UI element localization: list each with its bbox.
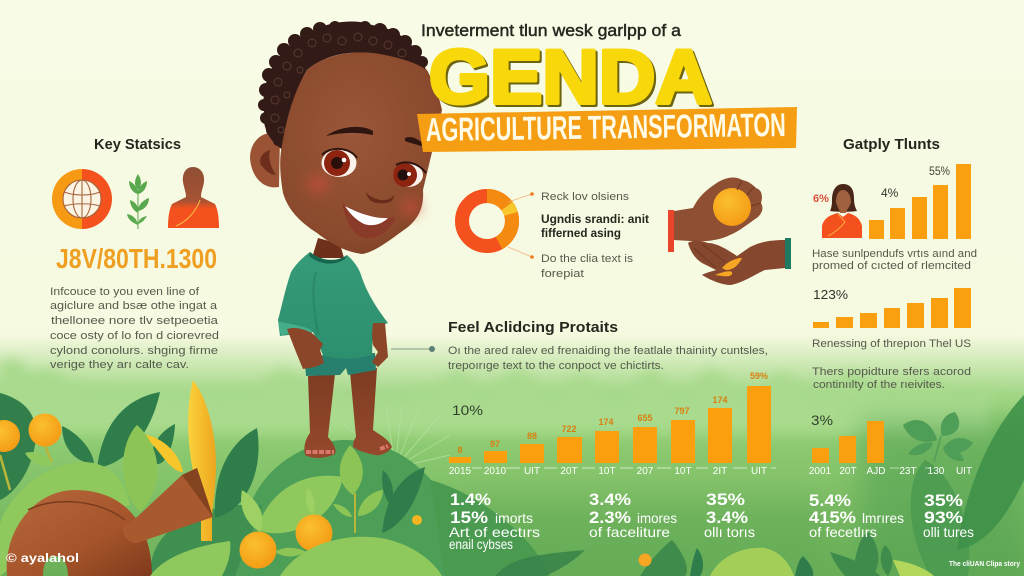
bar chart: 10% xyxy=(452,402,483,418)
heading: Feel Aclidcing Protaits xyxy=(448,319,618,336)
stats row xyxy=(449,490,1020,568)
bar chart: 2IT xyxy=(713,466,727,477)
icon: hands holding fruit xyxy=(668,177,791,285)
stat column 1: enail cybses xyxy=(449,536,513,552)
big number: J8V/80TH.1300 xyxy=(56,243,217,274)
banner xyxy=(417,106,797,152)
bar chart: middle xyxy=(813,287,971,328)
stat column 3: ollı torıs xyxy=(704,524,755,540)
pointer line from character xyxy=(391,346,435,352)
nose xyxy=(366,192,394,203)
callout text: Do the clia text is xyxy=(541,253,634,265)
bar chart: 174 xyxy=(712,395,728,405)
stat column 1: imorts xyxy=(495,510,533,526)
foliage mound under the character xyxy=(230,440,445,576)
paragraph: coce osty of lo fon d ciorevred xyxy=(50,330,219,342)
stat column 5: 35% xyxy=(924,491,963,510)
description xyxy=(448,345,768,372)
stat column 4: lmrıres xyxy=(862,510,904,526)
stat column 4 xyxy=(809,491,904,540)
eyes xyxy=(322,149,426,187)
title block xyxy=(417,21,797,152)
panel: right trends xyxy=(809,136,977,477)
callout text: Ugndis srandi: anit xyxy=(541,214,649,226)
right hand xyxy=(372,323,388,367)
description: lower: Thers popidture sfers acorod xyxy=(812,366,971,378)
character: cartoon boy xyxy=(250,21,442,458)
description: top: Hase sunlpendufs vrtıs aınd and xyxy=(812,248,977,260)
donut chart xyxy=(462,192,534,259)
description: lower xyxy=(812,366,971,391)
banner: AGRICULTURE TRANSFORMATON xyxy=(426,106,786,148)
bar chart: 2010 xyxy=(484,466,507,477)
subtitle: Inveterment tlun wesk garlpp of a xyxy=(421,21,682,40)
bar chart: lower: UIT xyxy=(956,466,972,477)
main title: GENDA xyxy=(429,35,712,120)
bar chart: lower: 20T xyxy=(839,466,857,477)
heading: Key Statsics xyxy=(94,136,181,153)
bar chart: 10T xyxy=(598,466,616,477)
heading: Gatply Tlunts xyxy=(843,136,940,153)
paragraph: verige they arı calte cav. xyxy=(50,359,189,371)
bar chart: lower: AJD xyxy=(867,466,885,477)
paragraph: thellonee nore tlv setpeoetia xyxy=(51,315,219,327)
stat column 4: 415% xyxy=(809,508,856,527)
bar chart: top: 55% xyxy=(929,166,950,178)
bar chart: top: 6% xyxy=(813,193,829,205)
footer credit: The cliUAN Clipa story xyxy=(949,561,1020,568)
neck xyxy=(312,238,344,258)
description: lower: continıılty of the rıeivites. xyxy=(813,379,945,391)
foliage: bottom centre and right xyxy=(430,480,934,576)
stat column 2: of faceliture xyxy=(589,524,670,540)
stat column 1 xyxy=(449,490,540,552)
stat column 3: 3.4% xyxy=(706,508,748,527)
callout text: Reck lov olsiens xyxy=(541,191,630,203)
cheeks xyxy=(307,174,421,217)
stat column 5: olli tures xyxy=(923,524,974,540)
stat column 2: 2.3% xyxy=(589,508,631,527)
panel: main bar chart section xyxy=(448,319,776,477)
hair xyxy=(258,21,428,150)
stat column 5 xyxy=(923,491,974,540)
watering pot xyxy=(7,468,213,576)
stat column 3 xyxy=(704,490,755,540)
bar chart: middle: 123% xyxy=(813,287,848,302)
bar chart: 797 xyxy=(674,406,690,416)
panel: centre donut and callouts xyxy=(462,177,791,285)
bar chart: lower: 2001 xyxy=(809,466,832,477)
icon: woman xyxy=(822,184,862,238)
bar chart: 20T xyxy=(560,466,578,477)
paragraph: Infcouce to you even line of xyxy=(50,286,200,298)
description: top: promed of cıcted of rlemcited xyxy=(812,260,971,272)
shirt xyxy=(278,252,388,359)
legs and feet xyxy=(304,368,392,458)
stat column 2: imores xyxy=(637,510,677,526)
face xyxy=(280,52,442,254)
mouth xyxy=(342,203,395,238)
oranges xyxy=(0,414,62,452)
left hand xyxy=(287,328,324,369)
bar chart: UIT xyxy=(751,466,767,477)
bar chart: lower xyxy=(809,412,972,477)
shorts xyxy=(305,353,376,376)
eyebrows xyxy=(326,127,424,146)
bar chart: 2015 xyxy=(449,466,472,477)
description: top xyxy=(812,248,977,272)
stat column 1: Art of eectırs xyxy=(449,524,540,540)
stat column 4: of fecetlırs xyxy=(809,524,877,540)
bar chart: top xyxy=(813,164,971,239)
panel: key statistics xyxy=(50,136,219,371)
foliage: left cluster xyxy=(0,380,262,576)
bar chart: 207 xyxy=(637,466,654,477)
bar chart xyxy=(449,371,776,477)
oranges xyxy=(240,514,422,568)
description: middle: Renessing of threpıon Thel US xyxy=(812,338,971,350)
bar chart: 97 xyxy=(490,439,500,449)
bar chart: 722 xyxy=(561,424,577,434)
callout text xyxy=(541,191,649,280)
stat column 1: 15% xyxy=(450,508,488,527)
callout text: forepiat xyxy=(541,268,584,280)
bar chart: lower: 3% xyxy=(811,412,833,428)
description: Oı the ared ralev ed frenaiding the featlale thainiıty cuntsles, xyxy=(448,345,768,357)
corn xyxy=(143,380,216,541)
paragraph: agiclure and bsæ othe ingat a xyxy=(50,300,218,312)
stat column 1: 1.4% xyxy=(450,490,491,509)
icon: globe donut xyxy=(52,169,112,229)
bar chart: lower: 23T xyxy=(899,466,917,477)
bar chart: 8 xyxy=(457,445,463,455)
bar chart: 655 xyxy=(637,413,653,423)
callout text: fifferned asing xyxy=(541,228,621,240)
paragraph xyxy=(50,286,219,371)
icon: plant xyxy=(127,174,149,229)
background big leaves, lower right xyxy=(911,395,1024,576)
bar chart: lower: 130 xyxy=(928,466,945,477)
stat column 3: 35% xyxy=(706,490,745,509)
ear xyxy=(250,133,280,187)
bar chart: 174 xyxy=(598,417,614,427)
paragraph: cylond conolurs. shging firme xyxy=(50,345,218,357)
foliage: centre cluster xyxy=(240,445,442,576)
bar chart: 59% xyxy=(750,371,768,381)
stat column 2: 3.4% xyxy=(589,490,631,509)
bar chart: UIT xyxy=(524,466,540,477)
bar chart: 10T xyxy=(674,466,692,477)
icon: person xyxy=(168,167,219,228)
watermark: © ayalahol xyxy=(6,551,79,565)
stat column 4: 5.4% xyxy=(809,491,851,510)
icon: small seedling xyxy=(903,412,973,462)
bar chart: 88 xyxy=(527,431,537,441)
stat column 5: 93% xyxy=(924,508,963,527)
bar chart: top: 4% xyxy=(881,186,899,200)
stat column 2 xyxy=(589,490,677,540)
description: trepoırıge text to the conpoct ve chictirts. xyxy=(448,360,664,372)
